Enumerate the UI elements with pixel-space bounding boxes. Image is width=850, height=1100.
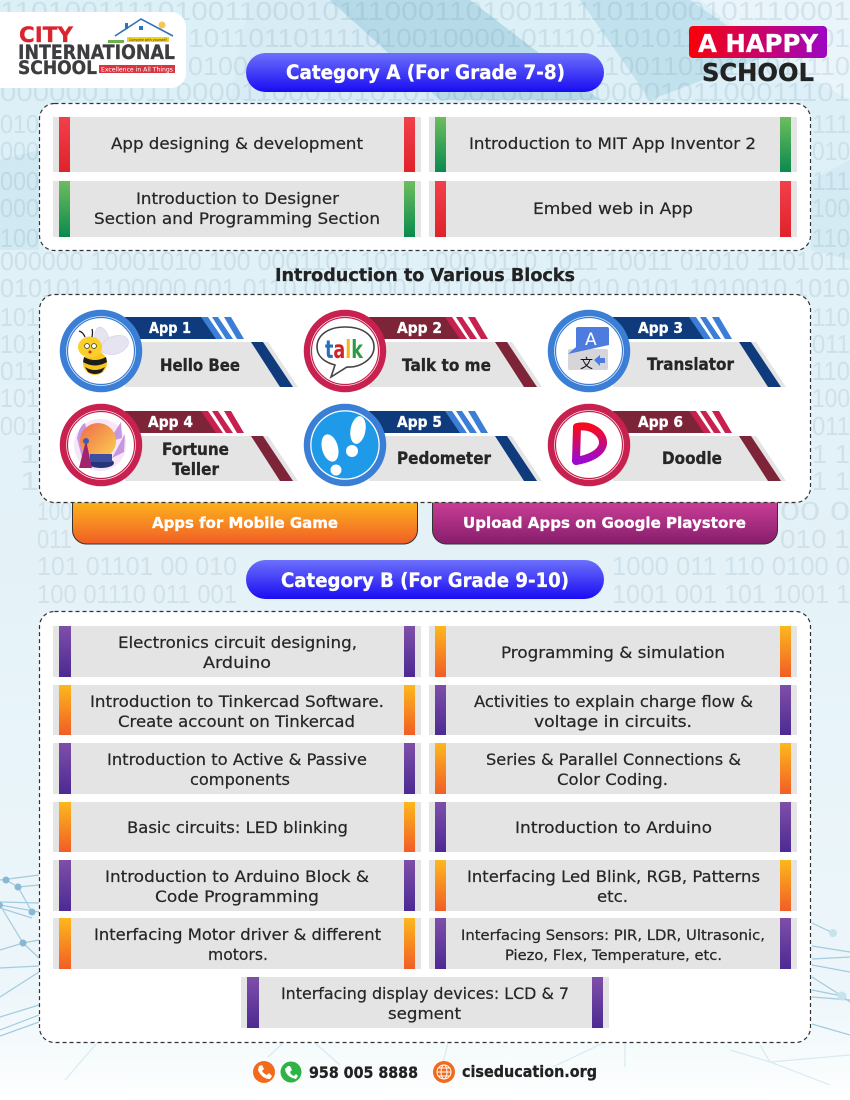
icon: talk bubble [317,327,374,377]
background: 10110110111101001000010111011010111110010001 [188,23,850,53]
background: 1000 011 110 0100 0 [612,551,850,581]
badge: A Happy School: A HAPPY [698,29,819,58]
topic: Series and parallel: Series & Parallel Connections & [486,750,741,769]
icon: translator [568,327,609,372]
icon: bee [78,326,131,375]
topic: Motor driver [53,918,421,969]
background: 00 0 [780,496,850,526]
topic: Electronics circuit: Electronics circuit designing, [118,633,357,652]
logo: City International School: SCHOOL [18,57,97,79]
topic: Tinkercad: Create account on Tinkercad [118,712,355,731]
website: ciseducation.org [462,1062,597,1081]
topic: Intro to Arduino: Introduction to Arduino [515,818,712,837]
background: 011 [37,524,72,554]
topic: Display devices [241,977,609,1028]
topic: Arduino block and code [53,860,421,911]
background: 101 [0,302,39,332]
background: 100 [0,223,39,253]
background: 000 [0,166,39,196]
panel: Category B topics [40,612,810,1042]
background: 00000011011000011000101010100010011100000101100011101 [0,77,850,107]
background: 010 1 [780,524,850,554]
icon: fortune orb [74,419,126,471]
topic: Active and passive: Introduction to Active & Passive [107,750,367,769]
logo: City International School: INTERNATIONAL [18,41,175,64]
badge: A Happy School: SCHOOL [702,58,814,87]
background: 000 [0,193,39,223]
topic: Programming and simulation: Programming & simulation [501,643,725,662]
topic: Embed web: Embed web in App [533,199,693,218]
background: 010 [0,109,39,139]
topic: Intro to Arduino [429,802,797,852]
topic: Sensors [429,918,797,969]
panel: apps [40,294,810,502]
background: 1 1 [812,466,850,496]
app 5 card: Pedometer: Pedometer [397,449,492,468]
topic: Led interfacing: Interfacing Led Blink, RGB, Patterns [467,867,760,886]
topic: Sensors: Piezo, Flex, Temperature, etc. [505,948,722,964]
app 5 card: Pedometer: App 5 [397,413,442,431]
topic: Designer and Programming Section [53,181,421,237]
button: Apps for Mobile Game [72,500,418,544]
phone number: 958 005 8888 [309,1063,418,1082]
topic: MIT App Inventor [429,117,797,172]
topic: Motor driver: Interfacing Motor driver & different [94,925,381,944]
topic: Charge flow: Activities to explain charge flow & [474,692,753,711]
badge: A Happy School [689,26,827,87]
heading: Category A [246,53,604,92]
topic: Led interfacing [429,860,797,911]
app 3 card: Translator: App 3 [638,319,683,337]
topic: MIT App Inventor: Introduction to MIT App Inventor 2 [469,134,756,153]
app 6 card: Doodle: Doodle [662,449,722,468]
logo: City International School [0,12,186,88]
background: 100 01110 011 001 [37,579,237,609]
heading: Category B: Category B (For Grade 9-10) [281,569,569,592]
logo: City International School: CITY [19,23,74,47]
icon: talk bubble: talk [325,335,364,364]
heading: Introduction to Various Blocks: Introduction to Various Blocks [275,265,575,286]
background: 101 [0,329,39,359]
background: 001 [0,411,39,441]
topic: Active and passive [53,743,421,794]
topic: Embed web [429,181,797,237]
background: 000 [0,136,39,166]
icon: phone [253,1061,275,1083]
background: 0100 [188,51,248,81]
topic: LED blinking: Basic circuits: LED blinking [127,818,348,837]
topic: Arduino block and code: Introduction to Arduino Block & [105,867,369,886]
logo: City International School: Excellence in All Things [101,66,174,74]
topic: App designing [53,117,421,172]
app 4 card: Fortune Teller: Fortune [162,440,229,459]
icon: footprints [312,412,378,478]
button: Upload Apps on Google Playstore: Upload Apps on Google Playstore [463,514,746,532]
heading: Category B [246,560,604,599]
topic: App designing: App designing & development [111,134,363,153]
button: Apps for Mobile Game: Apps for Mobile Game [152,514,338,532]
topic: Programming and simulation [429,626,797,677]
topic: Electronics circuit: Arduino [203,653,271,672]
icon: whatsapp [280,1062,302,1082]
app 4 card: Fortune Teller: App 4 [148,413,193,431]
topic: Display devices: segment [388,1004,461,1023]
topic: Designer and Programming Section: Section and Programming Section [94,209,380,228]
background: 1 [20,439,39,469]
topic: Led interfacing: etc. [597,887,628,906]
topic: Sensors: Interfacing Sensors: PIR, LDR, Ultrasonic, [461,928,765,944]
background: 101 [0,383,39,413]
heading: Category A: Category A (For Grade 7-8) [286,61,565,84]
icon: globe [433,1061,455,1083]
app 1 card: Hello Bee: Hello Bee [160,356,240,375]
topic: Electronics circuit [53,626,421,677]
app 6 card: Doodle [551,407,786,483]
app 1 card: Hello Bee [63,313,298,389]
topic: Charge flow: voltage in circuits. [534,712,692,731]
topic: Display devices: Interfacing display devices: LCD & 7 [281,984,569,1003]
topic: Designer and Programming Section: Introduction to Designer [136,189,339,208]
topic: Tinkercad [53,685,421,735]
icon: translator: A [585,330,597,350]
app 5 card: Pedometer [307,407,542,483]
logo: City International School: Compete with yourself! [129,38,167,42]
background: 011 [0,356,39,386]
topic: Arduino block and code: Code Programming [155,887,319,906]
app 4 card: Fortune Teller: Teller [172,460,220,479]
app 3 card: Translator: Translator [647,355,735,374]
app 2 card: Talk to me [307,313,542,389]
app 2 card: Talk to me: Talk to me [402,356,491,375]
app 6 card: Doodle: App 6 [638,413,683,431]
topic: Charge flow [429,685,797,735]
background: 100 [37,496,72,526]
app 2 card: Talk to me: App 2 [397,319,442,337]
background: 1 1 [812,439,850,469]
topic: Tinkercad: Introduction to Tinkercad Software. [90,692,384,711]
footer contacts [253,1061,597,1083]
background: 10011010111011110 [604,51,850,81]
topic: LED blinking [53,802,421,852]
app 4 card: Fortune Teller [63,407,298,483]
topic: Series and parallel: Color Coding. [557,770,668,789]
topic: Active and passive: components [190,770,290,789]
app 3 card: Translator [551,313,786,389]
topic: Motor driver: motors. [208,945,268,964]
app 1 card: Hello Bee: App 1 [149,319,191,337]
background: 101 01101 00 010 [37,551,237,581]
icon: doodle D [576,426,603,461]
topic: Series and parallel [429,743,797,794]
icon: translator: 文 [580,353,593,372]
button: Upload Apps on Google Playstore [432,500,778,544]
panel: Category A topics [40,104,810,250]
background: 1 [20,466,39,496]
